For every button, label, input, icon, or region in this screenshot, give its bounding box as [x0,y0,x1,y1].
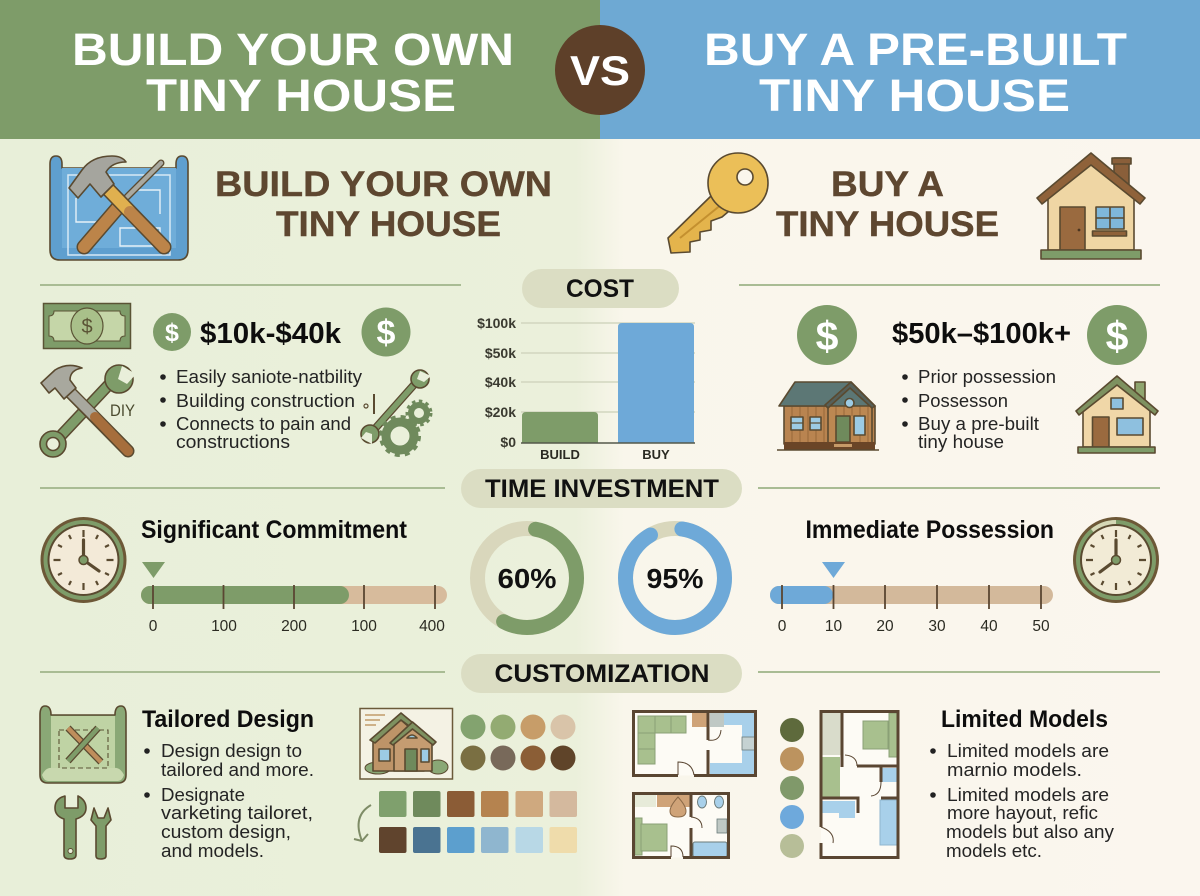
right coin: $ [1106,313,1129,359]
donut: 95%: 95% [646,563,704,594]
bar labels: BUILD [540,447,580,462]
heading: buy a tiny house: TINY HOUSE [776,205,999,244]
pill: time investment [461,469,742,508]
y axis labels [477,315,516,450]
bullets: build cost: Building construction [176,390,355,411]
small coin: $ [165,319,179,347]
section divider: cost [40,269,1160,308]
marker [142,562,165,578]
icon: small house [1076,376,1158,453]
left coin [797,305,857,365]
scale labels: 0 [149,618,158,635]
bullets: tailored design: Designate [161,784,245,805]
bullets: limited models: Limited models are [947,784,1109,805]
VS badge: VS [570,47,630,94]
panel: build time [40,516,447,635]
bar labels [540,447,670,462]
y axis labels: $0 [500,434,516,450]
subheading: immediate possession: Immediate Possession [806,516,1054,544]
subheading: tailored design: Tailored Design [142,706,314,733]
marker [822,562,845,578]
scale labels: 50 [1032,618,1050,635]
heading: buy a tiny house: BUY A [831,165,944,204]
left header title: TINY HOUSE [146,70,456,121]
colour swatches [379,791,577,853]
scale labels: 400 [419,618,445,635]
right header title: BUY A PRE-BUILT [704,24,1127,75]
scale labels: 10 [825,618,842,635]
heading: build your own: TINY HOUSE [276,205,501,244]
bullets: limited models: models but also any [946,821,1115,842]
bullets: buy cost [902,366,1056,452]
bullets: build cost [160,366,363,452]
scale labels [778,618,1050,635]
panel: limited models [634,706,1115,861]
bullets: limited models: marnio models. [947,759,1082,780]
icon: clock [40,517,126,603]
scale labels: 30 [928,618,946,635]
icon: blueprint with hammer and screwdriver [50,156,188,260]
subheading: significant commitment: Significant Commitment [141,516,408,544]
bullets: limited models: Limited models are [947,740,1109,761]
icon: hammer and wrench DIY: DIY [110,401,135,420]
left coin: $ [816,313,839,359]
arrow [354,805,371,841]
pill: customization [461,654,742,693]
price: build: $10k-$40k [200,318,342,350]
pill: cost [522,269,679,308]
bar chart: cost comparison [477,315,695,462]
icon: wrenches [55,796,111,859]
subheading: limited models: Limited Models [941,706,1108,733]
progress bar: buy [770,585,1053,609]
scale labels: 0 [778,618,787,635]
bullets: buy cost: Prior possession [918,366,1056,387]
icon: wrench and gears [361,370,431,455]
bullets: buy cost: Buy a pre-built [918,413,1039,434]
floor plan 2 [634,793,728,858]
scale labels: 100 [211,618,237,635]
bullets: buy cost: Possesson [918,390,1008,411]
bullets: tailored design: tailored and more. [161,759,314,780]
bullets: limited models: more hayout, refic [947,802,1098,823]
heading: build your own: BUILD YOUR OWN [215,165,552,204]
scale labels: 100 [351,618,377,635]
bullets: limited models [930,740,1115,861]
icon: gold key [668,153,768,253]
y axis labels: $20k [485,404,516,420]
floor plan 3 [821,712,898,858]
small coin [153,313,191,351]
bullets: tailored design: custom design, [161,821,291,842]
panel: tailored design [40,706,577,861]
price: buy: $50k–$100k+ [892,318,1071,350]
right header title [704,24,1127,121]
icon: clock [1073,517,1159,603]
bullets: build cost: Connects to pain and [176,413,351,434]
right coin [1087,305,1147,365]
pill: time investment: TIME INVESTMENT [485,475,719,503]
header banner [0,0,1200,139]
icon: wooden cabin [777,382,879,450]
bullets: limited models: models etc. [946,840,1042,861]
panel: buy time [770,516,1159,635]
large coin: $ [377,314,396,352]
pill: customization: CUSTOMIZATION [494,660,710,688]
colour dots [460,714,576,770]
donut: 60% [470,521,584,635]
panel: build cost [40,304,431,457]
bullets: tailored design: Design design to [161,740,302,761]
bar: build [522,412,598,443]
bullets: build cost: Easily saniote-natbility [176,366,363,387]
section divider: customization [40,654,1160,693]
icon: house with chimney [1037,153,1145,259]
icon: hammer and wrench DIY [40,365,136,457]
floor plan 1 [634,712,756,776]
section divider: time investment [40,469,1160,508]
scale labels [149,618,445,635]
bullets: tailored design: and models. [161,840,264,861]
y axis labels: $50k [485,345,516,361]
bar labels: BUY [642,447,670,462]
bullets: tailored design [144,740,314,861]
left header title: BUILD YOUR OWN [72,24,514,75]
heading: buy a tiny house [776,165,999,244]
heading: build your own [215,165,552,244]
bar: buy [618,323,694,443]
large coin [362,308,410,356]
colour dots [780,718,804,858]
donut: 60%: 60% [498,563,557,594]
right header title: TINY HOUSE [759,70,1070,121]
icon: dollar bill [44,304,130,348]
left header title [72,24,514,121]
bullets: build cost: constructions [176,431,290,452]
scale labels: 20 [876,618,894,635]
pill: cost: COST [566,275,634,303]
bullets: buy cost: tiny house [918,431,1004,452]
y axis labels: $40k [485,374,516,390]
scale labels: 200 [281,618,307,635]
scale labels: 40 [980,618,998,635]
icon: dollar bill: $ [81,316,93,338]
VS badge [555,25,645,115]
icon: framed house [360,708,452,779]
y axis labels: $100k [477,315,516,331]
progress bar: build [141,585,447,609]
donut: 95% [619,522,731,634]
bullets: tailored design: varketing tailoret, [161,802,313,823]
icon: design plan [40,706,126,783]
panel: buy cost [777,305,1158,453]
